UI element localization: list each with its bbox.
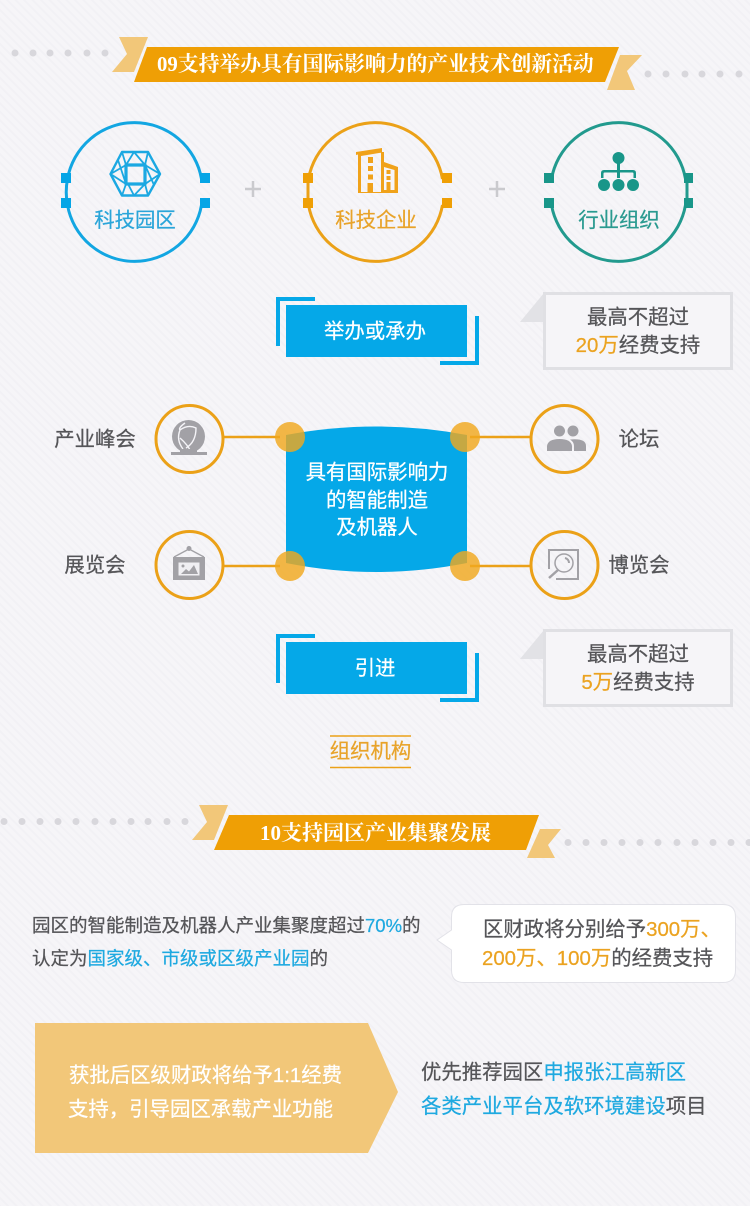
- central banner: 的智能制造: [326, 489, 428, 512]
- left dots: [0, 818, 188, 825]
- icon: globe: [171, 420, 207, 455]
- callout: 5万: 最高不超过: [587, 643, 689, 666]
- label: 科技园区: [94, 209, 176, 232]
- callout: 20万: 最高不超过: [587, 306, 689, 329]
- icon: magnifier: [549, 550, 578, 579]
- item: 展览会: [64, 532, 223, 598]
- ribbon tail left: [192, 805, 228, 840]
- connector nodes: [275, 422, 480, 581]
- text: criteria: 认定为国家级、市级或区级产业园的: [32, 948, 328, 969]
- callout: funding: [437, 904, 736, 982]
- ribbon tail right: [607, 55, 642, 90]
- heading text: 10支持园区产业集聚发展: [260, 821, 491, 845]
- icon: picture frame: [173, 546, 205, 580]
- text: priority recommendation: 各类产业平台及软环境建设项目: [421, 1095, 706, 1118]
- arrow panel: [35, 1023, 398, 1153]
- circle: 行业组织: [544, 123, 693, 261]
- right dots: [644, 70, 742, 78]
- item: 论坛: 论坛: [619, 428, 659, 451]
- callout: 5万: 5万经费支持: [581, 671, 695, 694]
- organizer label: [330, 736, 411, 768]
- organizer label: 组织机构: [330, 740, 411, 763]
- icon: people: [547, 426, 586, 451]
- circle: 科技企业: [303, 123, 452, 261]
- left dots: [12, 50, 108, 56]
- ribbon tail left: [112, 37, 148, 72]
- ribbon: [214, 815, 539, 850]
- item: 产业峰会: [54, 406, 223, 472]
- callout: 20万: 20万经费支持: [576, 334, 700, 357]
- callout: funding: 200万、100万的经费支持: [482, 947, 713, 970]
- section heading 10: [0, 805, 750, 858]
- connector lines: [224, 437, 530, 566]
- central banner: 及机器人: [336, 516, 418, 539]
- box: 引进: [276, 634, 479, 702]
- text: priority recommendation: 优先推荐园区申报张江高新区: [421, 1061, 686, 1084]
- item: 博览会: [531, 532, 670, 598]
- box: 举办或承办: 举办或承办: [324, 320, 426, 343]
- arrow panel: 支持，引导园区承载产业功能: [68, 1098, 333, 1121]
- callout: funding: 区财政将分别给予300万、: [483, 918, 721, 941]
- icon: gem hexagon: [110, 152, 160, 196]
- label: 行业组织: [578, 209, 660, 232]
- label: 科技企业: [335, 209, 417, 232]
- item: 博览会: 博览会: [608, 554, 670, 577]
- ribbon tail right: [527, 829, 561, 858]
- text: criteria: [32, 915, 421, 969]
- heading text: 09支持举办具有国际影响力的产业技术创新活动: [157, 53, 594, 76]
- callout: 20万: [520, 293, 732, 368]
- central banner: 具有国际影响力: [306, 461, 448, 484]
- item: 展览会: 展览会: [64, 554, 126, 577]
- icon: org chart: [598, 152, 639, 191]
- callout: 5万: [520, 630, 732, 706]
- text: priority recommendation: [421, 1061, 706, 1118]
- text: criteria: 园区的智能制造及机器人产业集聚度超过70%的: [32, 915, 421, 936]
- section heading 09: [12, 37, 742, 90]
- circle: 科技园区: [61, 123, 210, 261]
- ribbon: [134, 47, 619, 82]
- icon: buildings: [356, 148, 398, 193]
- item: 论坛: [531, 406, 659, 472]
- central banner: [286, 426, 467, 572]
- plus: [245, 181, 261, 197]
- plus: [489, 181, 505, 197]
- item: 产业峰会: 产业峰会: [54, 428, 136, 451]
- box: 引进: 引进: [355, 657, 395, 680]
- right dots: [564, 839, 750, 846]
- box: 举办或承办: [276, 297, 479, 365]
- arrow panel: 获批后区级财政将给予1:1经费: [69, 1064, 342, 1087]
